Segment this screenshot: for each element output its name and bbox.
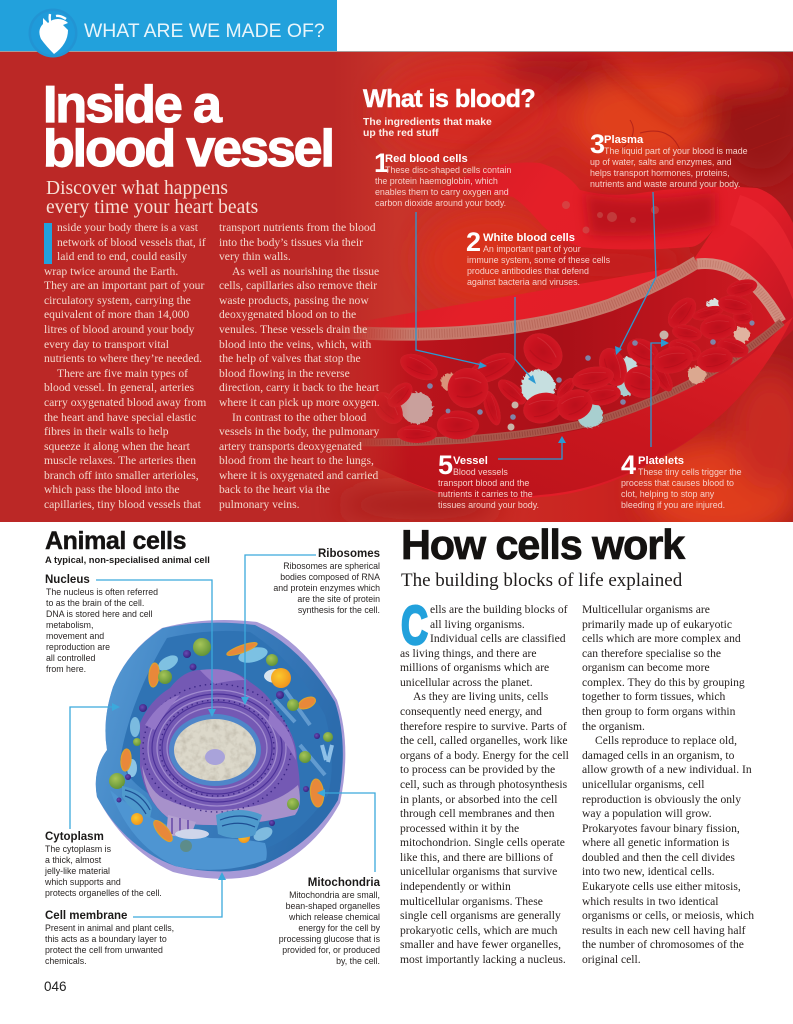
body text column 1: capillaries, tiny blood vessels that bbox=[44, 498, 201, 511]
divider bbox=[0, 51, 793, 52]
sub heading: animal cell: A typical, non-specialised animal cell bbox=[45, 555, 210, 565]
vessel section wall bbox=[340, 262, 782, 442]
label: cytoplasm: Cytoplasm bbox=[45, 831, 104, 843]
callout 3: plasma: The liquid part of your blood is made bbox=[604, 146, 748, 156]
label: mitochondria: which release chemical bbox=[289, 912, 380, 922]
how cells body column 2: then group to form organs within bbox=[582, 705, 735, 718]
body text column 2 bbox=[219, 221, 380, 511]
leader lines bbox=[70, 555, 375, 917]
how cells body column 1 bbox=[400, 603, 569, 966]
how cells body column 1: As they are living units, cells bbox=[413, 690, 548, 703]
body text column 1: equivalent of more than 14,000 bbox=[44, 308, 189, 321]
label: mitochondria: processing glucose that is bbox=[279, 934, 380, 944]
how cells body column 2: unicellular organisms, cell bbox=[582, 778, 704, 791]
label: cytoplasm: which supports and bbox=[45, 876, 121, 886]
how cells body column 1: to process can be provided by the bbox=[400, 763, 555, 776]
sub heading: ingredients: The ingredients that make bbox=[363, 117, 492, 128]
callout 5: vessel bbox=[438, 450, 539, 510]
how cells body column 1: unicellular across the planet. bbox=[400, 676, 533, 689]
sub heading: ingredients bbox=[363, 117, 492, 139]
body text column 1: wrap twice around the Earth. bbox=[44, 265, 178, 278]
label: ribosomes bbox=[273, 548, 380, 615]
body text column 2: very thin walls. bbox=[219, 250, 291, 263]
how cells body column 2 bbox=[582, 603, 754, 966]
label: cell membrane: Cell membrane bbox=[45, 910, 127, 922]
how cells body column 2: doubled and then the cell divides bbox=[582, 851, 735, 864]
body text column 2: into the body’s tissues via their bbox=[219, 236, 363, 249]
how cells body column 1: consequently need energy, and bbox=[400, 705, 542, 718]
how cells body column 1: like this, and there are billions of bbox=[400, 851, 553, 864]
label: cell membrane: chemicals. bbox=[45, 956, 87, 966]
callout 3: plasma: Plasma bbox=[604, 134, 643, 146]
how cells body column 1: millions of organisms which are bbox=[400, 661, 549, 674]
how cells body column 1: processed within it by the bbox=[400, 822, 519, 835]
heading: animal cells: Animal cells bbox=[45, 527, 186, 555]
callout 5: vessel: tissues around your body. bbox=[438, 500, 539, 510]
callout 1: red blood cells: These disc-shaped cells contain bbox=[385, 165, 511, 175]
callout 2: white blood cells: against bacteria and viruses. bbox=[467, 277, 580, 287]
callout 2: white blood cells: 2 bbox=[466, 227, 481, 257]
callout 1: red blood cells: Red blood cells bbox=[385, 153, 468, 165]
body text column 1: every day to transport vital bbox=[44, 338, 169, 351]
how cells body column 2: Eukaryote cells use either mitosis, bbox=[582, 880, 741, 893]
callout 3: plasma: 3 bbox=[590, 129, 605, 159]
label: mitochondria: energy for the cell by bbox=[298, 922, 380, 932]
subheading: building blocks: The building blocks of life explained bbox=[401, 570, 682, 591]
body text column 1: There are five main types of bbox=[57, 367, 188, 380]
callout 1: red blood cells bbox=[374, 148, 511, 208]
how cells body column 2: the number of chromosomes of the bbox=[582, 938, 744, 951]
how cells body column 1: independently or within bbox=[400, 880, 511, 893]
how cells body column 2: reproduction is obviously the only bbox=[582, 793, 741, 806]
callout leader lines bbox=[416, 192, 669, 459]
how cells body column 2: way a population will grow. bbox=[582, 807, 712, 820]
body text column 1: nside your body there is a vast bbox=[57, 221, 198, 234]
vessel lower surface bbox=[340, 317, 793, 499]
callout 1: red blood cells: enables them to carry oxygen and bbox=[375, 187, 509, 197]
endoplasmic reticulum bbox=[140, 669, 300, 838]
how cells body column 2: organisms or cells, or meiosis, which bbox=[582, 909, 754, 922]
subtitle bbox=[46, 178, 258, 218]
callout 3: plasma bbox=[590, 129, 748, 189]
label: cytoplasm: protects organelles of the cell. bbox=[45, 888, 162, 898]
how cells body column 1: ells are the building blocks of bbox=[430, 603, 567, 616]
callout 2: white blood cells bbox=[466, 227, 610, 287]
how cells body column 1: most importantly lacking a nucleus. bbox=[400, 953, 566, 966]
drop cap C: C bbox=[401, 594, 428, 656]
body text column 2: In contrast to the other blood bbox=[232, 411, 366, 424]
how cells body column 1: smaller and have fewer organelles, bbox=[400, 938, 561, 951]
heading: how cells work: How cells work bbox=[401, 521, 684, 568]
callout 4: platelets: clot, helping to stop any bbox=[621, 489, 714, 499]
callout 5: vessel: Blood vessels bbox=[453, 467, 508, 477]
body text column 2: back to the heart via the bbox=[219, 483, 330, 496]
how cells body column 2: where all genetic information is bbox=[582, 836, 729, 849]
label: nucleus: Nucleus bbox=[45, 574, 90, 586]
callout 2: white blood cells: produce antibodies that defend bbox=[467, 266, 589, 276]
label: cytoplasm: jelly-like material bbox=[45, 866, 110, 876]
body text column 1: branch off into smaller arterioles, bbox=[44, 469, 199, 482]
how cells body column 1: as living things, and there are bbox=[400, 647, 537, 660]
body text column 2: cells, capillaries also remove their bbox=[219, 279, 377, 292]
label: ribosomes: synthesis for the cell. bbox=[298, 604, 380, 614]
how cells body column 1: prokaryotic cells, which are much bbox=[400, 924, 557, 937]
title bbox=[43, 76, 333, 178]
icon: heart badge bbox=[28, 8, 78, 58]
body text column 1: They are an important part of your bbox=[44, 279, 204, 292]
label: nucleus: reproduction are bbox=[46, 642, 110, 652]
callout 3: plasma: helps transport hormones, proteins, bbox=[590, 168, 730, 178]
body text column 2: direction, carry it back to the heart bbox=[219, 381, 379, 394]
subtitle: every time your heart beats bbox=[46, 197, 258, 218]
page number: 046 bbox=[44, 979, 67, 994]
how cells body column 2: into two new, identical cells. bbox=[582, 865, 715, 878]
how cells body column 2: primarily made up of eukaryotic bbox=[582, 618, 732, 631]
callout 3: plasma: nutrients and waste around your body. bbox=[590, 179, 740, 189]
label: cytoplasm: The cytoplasm is bbox=[45, 844, 111, 854]
label: nucleus: all controlled bbox=[46, 652, 95, 662]
how cells body column 2: which results in two identical bbox=[582, 895, 719, 908]
how cells body column 2: original cell. bbox=[582, 953, 641, 966]
callout 4: platelets bbox=[621, 450, 742, 510]
how cells body column 1: through cell membranes and then bbox=[400, 807, 555, 820]
how cells body column 2: can therefore specialise so the bbox=[582, 647, 721, 660]
callout 4: platelets: process that causes blood to bbox=[621, 478, 734, 488]
how cells body column 2: Prokaryotes favour binary fission, bbox=[582, 822, 740, 835]
label: nucleus: DNA is stored here and cell bbox=[46, 608, 153, 618]
label: ribosomes: Ribosomes bbox=[318, 548, 380, 560]
title: blood vessel bbox=[43, 120, 333, 178]
body text column 2: blood from the heart to the lungs, bbox=[219, 454, 374, 467]
label: ribosomes: Ribosomes are spherical bbox=[283, 560, 380, 570]
body text column 2: As well as nourishing the tissue bbox=[232, 265, 379, 278]
heading: what is blood: What is blood? bbox=[363, 85, 535, 113]
body text column 1: squeeze it along when the heart bbox=[44, 440, 190, 453]
how cells body column 1: unicellular organisms that survive bbox=[400, 865, 557, 878]
how cells body column 2: organism can become more bbox=[582, 661, 710, 674]
label: ribosomes: bodies composed of RNA bbox=[280, 572, 380, 582]
callout 1: red blood cells: carbon dioxide around your body. bbox=[375, 198, 506, 208]
callout 5: vessel: transport blood and the bbox=[438, 478, 529, 488]
how cells body column 2: complex. They do this by grouping bbox=[582, 676, 745, 689]
callout 4: platelets: Platelets bbox=[638, 455, 684, 467]
body text column 1: which pass the blood into the bbox=[44, 483, 180, 496]
body text column 2: pulmonary veins. bbox=[219, 498, 300, 511]
body text column 2: blood flowing in the reverse bbox=[219, 367, 350, 380]
label: nucleus: movement and bbox=[46, 630, 104, 640]
how cells body column 2: Multicellular organisms are bbox=[582, 603, 710, 616]
organelles bbox=[109, 638, 333, 852]
callout 5: vessel: 5 bbox=[438, 450, 453, 480]
callout 3: plasma: up of water, salts and enzymes, and bbox=[590, 157, 732, 167]
sub heading: ingredients: up the red stuff bbox=[363, 128, 439, 139]
callout 5: vessel: nutrients it carries to the bbox=[438, 489, 533, 499]
body text column 2: waste products, passing the now bbox=[219, 294, 369, 307]
body text column 2: venules. These vessels drain the bbox=[219, 323, 367, 336]
label: nucleus: metabolism, bbox=[46, 620, 93, 630]
label: mitochondria: Mitochondria bbox=[308, 877, 380, 889]
callout 5: vessel: Vessel bbox=[453, 455, 488, 467]
body text column 2: blood into the veins, which, with bbox=[219, 338, 371, 351]
label: ribosomes: and protein enzymes which bbox=[273, 582, 380, 592]
blood cells bbox=[367, 276, 759, 443]
label: nucleus bbox=[45, 574, 158, 674]
how cells body column 1: organs of a body. Energy for the cell bbox=[400, 749, 569, 762]
drop cap I bbox=[44, 223, 52, 264]
callout 4: platelets: 4 bbox=[621, 450, 636, 480]
callout 1: red blood cells: the protein haemoglobin, which bbox=[375, 176, 498, 186]
body text column 2: transport nutrients from the blood bbox=[219, 221, 376, 234]
body text column 1: nutrients to where they’re needed. bbox=[44, 352, 202, 365]
body text column 1: laid end to end, could easily bbox=[57, 250, 187, 263]
body text column 1: network of blood vessels that, if bbox=[57, 236, 206, 249]
body text column 2: artery transports deoxygenated bbox=[219, 440, 362, 453]
how cells body column 2: cells which are more complex and bbox=[582, 632, 741, 645]
label: cell membrane: Present in animal and plant cells, bbox=[45, 922, 174, 932]
how cells body column 1: in plants, or absorbed into the cell bbox=[400, 793, 557, 806]
title: Inside a bbox=[43, 76, 220, 134]
body text column 2: where it can pick up more oxygen. bbox=[219, 396, 380, 409]
how cells body column 1: the cell, called organelles, work like bbox=[400, 734, 568, 747]
label: cell membrane bbox=[45, 910, 174, 966]
nucleus bbox=[169, 714, 261, 786]
vessel section interior bbox=[358, 269, 754, 440]
body text column 2: deoxygenated blood on to the bbox=[219, 308, 356, 321]
label: mitochondria: by, the cell. bbox=[336, 956, 380, 966]
label: mitochondria: Mitochondria are small, bbox=[289, 890, 380, 900]
label: mitochondria: bean-shaped organelles bbox=[286, 900, 380, 910]
how cells body column 2: the organism. bbox=[582, 720, 645, 733]
label: nucleus: to as the brain of the cell. bbox=[46, 598, 144, 608]
body text column 1: fibres in their walls to help bbox=[44, 425, 169, 438]
how cells body column 1: mitochondrion. Single cells operate bbox=[400, 836, 565, 849]
label: mitochondria bbox=[279, 877, 380, 966]
body text column 1: the heart and have special elastic bbox=[44, 411, 196, 424]
label: cytoplasm: a thick, almost bbox=[45, 854, 101, 864]
label: nucleus: The nucleus is often referred bbox=[46, 586, 158, 596]
body text column 1 bbox=[44, 221, 206, 511]
label: cell membrane: this acts as a boundary layer to bbox=[45, 934, 167, 944]
body text column 1: litres of blood around your body bbox=[44, 323, 194, 336]
label: nucleus: from here. bbox=[46, 664, 86, 674]
how cells body column 2: Cells reproduce to replace old, bbox=[595, 734, 737, 747]
callout 2: white blood cells: An important part of your bbox=[483, 244, 581, 254]
label: ribosomes: are the site of protein bbox=[297, 594, 380, 604]
body text column 2: vessels in the body, the pulmonary bbox=[219, 425, 379, 438]
callout 2: white blood cells: immune system, some of these cells bbox=[467, 255, 610, 265]
body text column 1: carry oxygenated blood away from bbox=[44, 396, 206, 409]
how cells body column 1: therefore respire to survive. Parts of bbox=[400, 720, 567, 733]
header label: WHAT ARE WE MADE OF? bbox=[84, 20, 325, 42]
body text column 2: where it is oxygenated and carried bbox=[219, 469, 378, 482]
callout 1: red blood cells: 1 bbox=[374, 148, 389, 178]
how cells body column 1: single cell organisms are generally bbox=[400, 909, 561, 922]
body text column 2: the help of valves that stop the bbox=[219, 352, 361, 365]
label: mitochondria: provided for, or produced bbox=[282, 944, 380, 954]
how cells body column 2: damaged cells in an organism, to bbox=[582, 749, 734, 762]
far vessel tube bbox=[340, 162, 793, 500]
panel: red blood vessel background with artwork bbox=[0, 52, 793, 522]
how cells body column 1: Individual cells are classified bbox=[430, 632, 566, 645]
callout 4: platelets: bleeding if you are injured. bbox=[621, 500, 725, 510]
how cells body column 2: results in each new cell having half bbox=[582, 924, 746, 937]
callout 4: platelets: These tiny cells trigger the bbox=[638, 467, 742, 477]
subtitle: Discover what happens bbox=[46, 178, 228, 199]
label: cell membrane: protect the cell from unwanted bbox=[45, 944, 163, 954]
body text column 1: circulatory system, carrying the bbox=[44, 294, 191, 307]
how cells body column 1: all living organisms. bbox=[430, 618, 525, 631]
body text column 1: blood vessel. In general, arteries bbox=[44, 381, 194, 394]
body text column 1: muscle relaxes. The arteries then bbox=[44, 454, 196, 467]
header bar bbox=[0, 0, 337, 51]
how cells body column 1: cell, such as through photosynthesis bbox=[400, 778, 567, 791]
how cells body column 1: multicellular organisms. These bbox=[400, 895, 543, 908]
how cells body column 2: allow growth of a new individual. In bbox=[582, 763, 752, 776]
callout 2: white blood cells: White blood cells bbox=[483, 232, 575, 244]
label: cytoplasm bbox=[44, 831, 162, 898]
how cells body column 2: together to form tissues, which bbox=[582, 690, 725, 703]
